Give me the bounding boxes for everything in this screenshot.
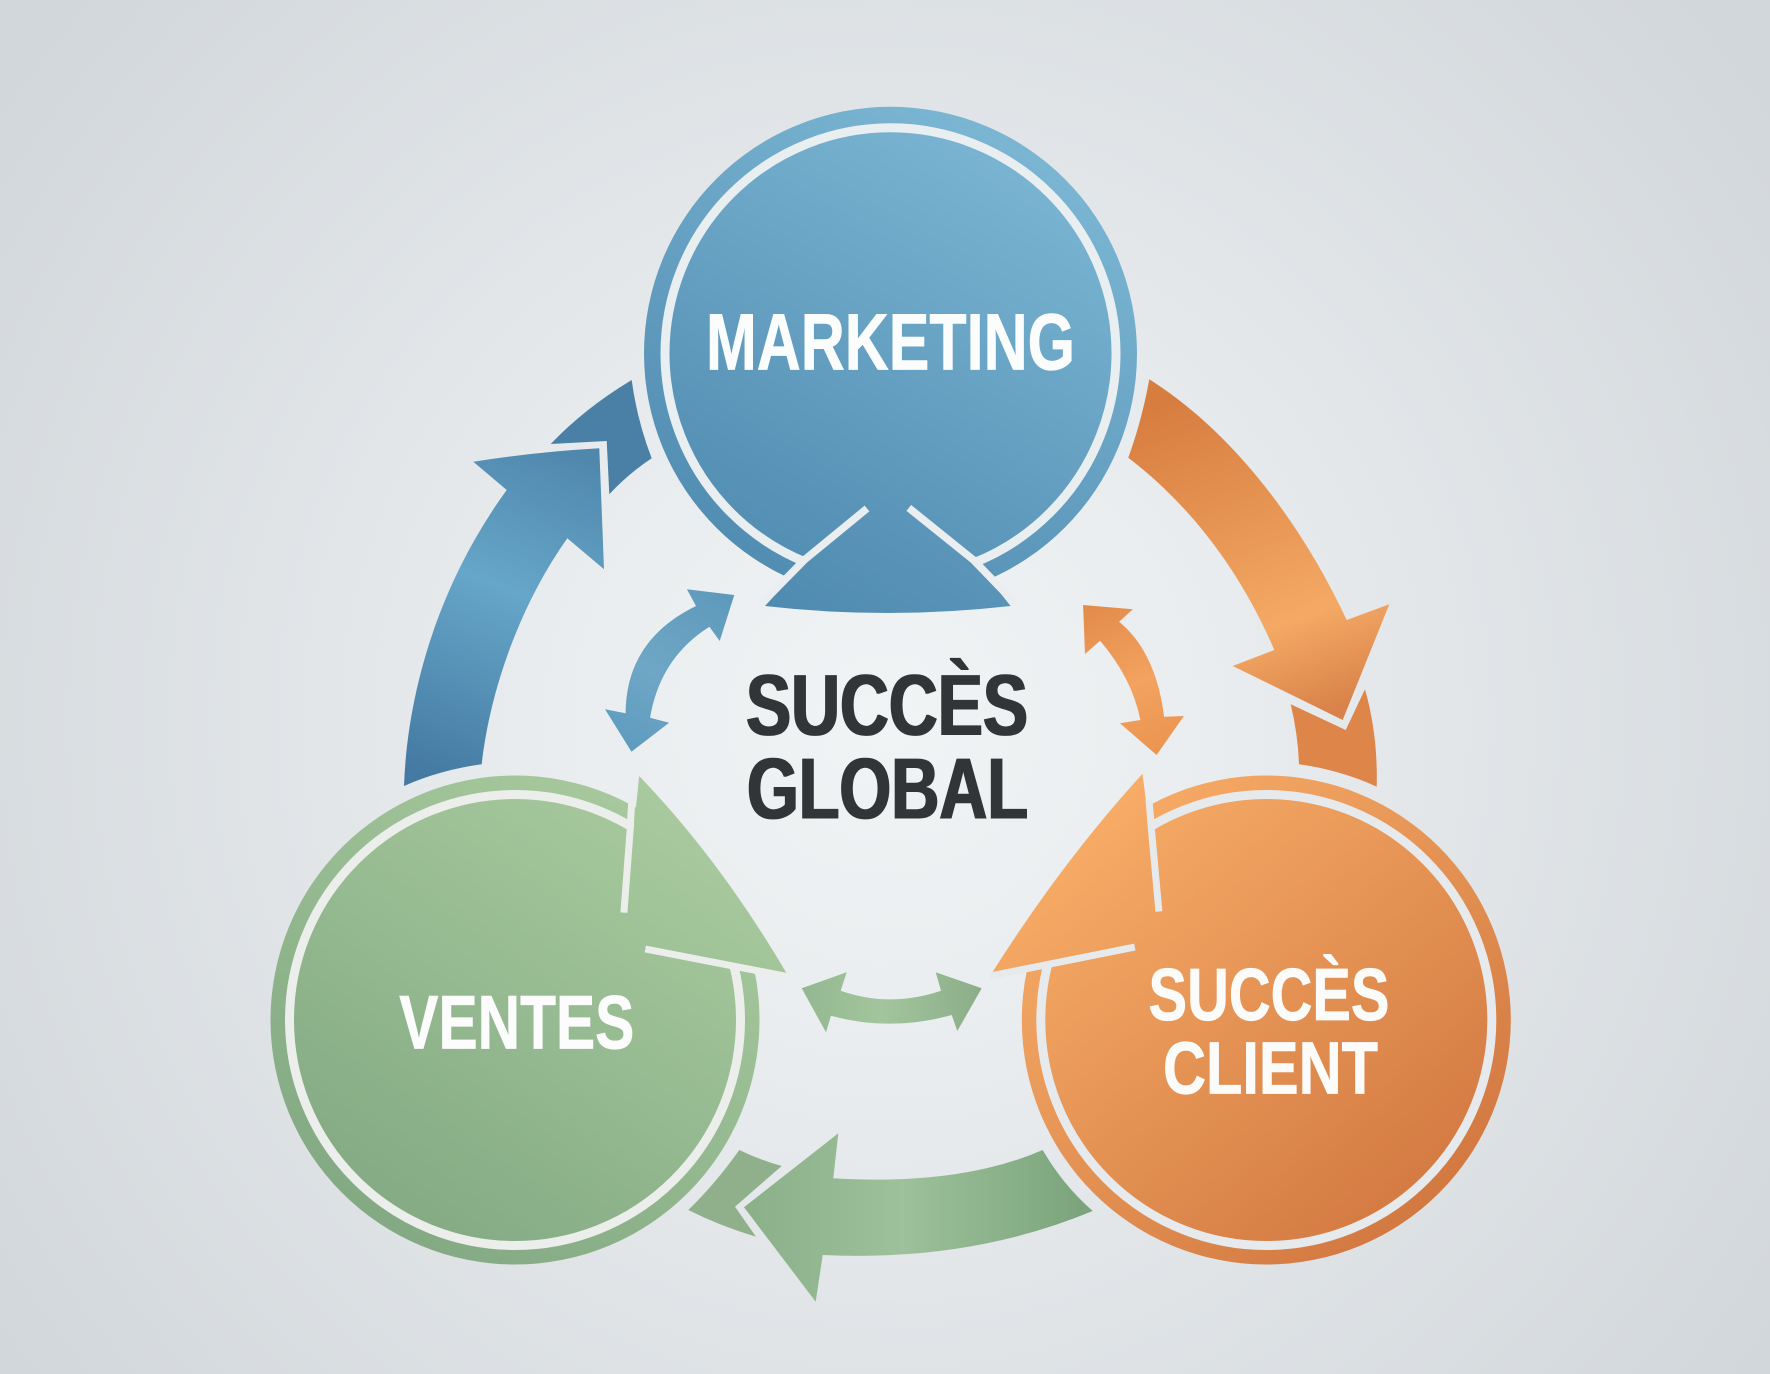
arrow: ventes to marketing [404, 380, 652, 786]
center title: succès global: GLOBAL [747, 740, 1028, 837]
arrow: marketing to succès client [1128, 379, 1389, 787]
small arrow: orange two-way [1083, 605, 1184, 755]
label: succès client: SUCCÈS [1148, 953, 1390, 1036]
small arrow: green two-way [802, 972, 982, 1032]
label: ventes: VENTES [399, 980, 634, 1066]
label: marketing: MARKETING [706, 297, 1075, 386]
label: succès client [1148, 953, 1390, 1109]
circle: ventes [270, 776, 790, 1264]
arrow: succès client to ventes [688, 1133, 1093, 1302]
circle: marketing [644, 107, 1137, 613]
circle: succès client [990, 774, 1511, 1264]
center title: succès global [746, 657, 1028, 837]
small arrow: blue two-way [605, 589, 734, 752]
label: succès client: CLIENT [1163, 1026, 1378, 1109]
center title: succès global: SUCCÈS [746, 657, 1028, 754]
